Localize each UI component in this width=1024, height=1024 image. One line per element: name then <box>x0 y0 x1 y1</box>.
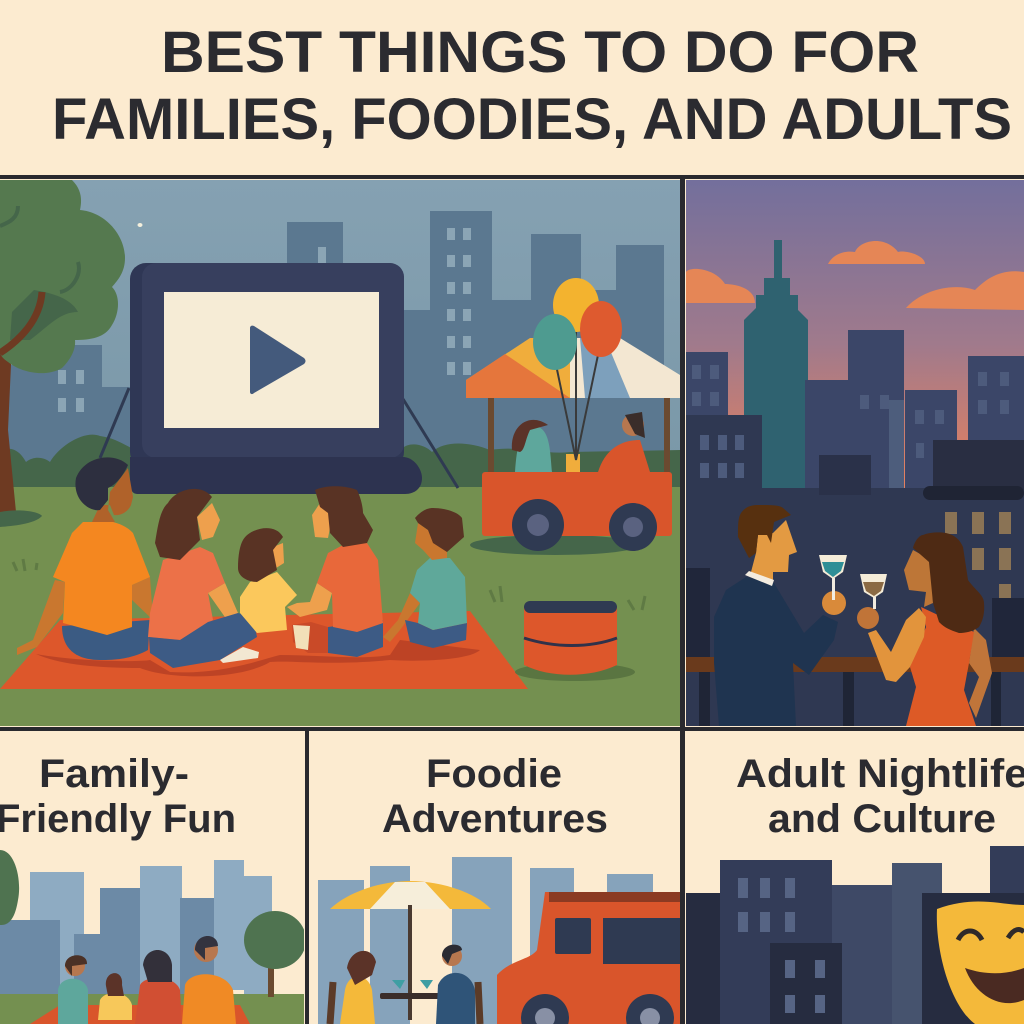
heading: and Culture <box>768 797 996 841</box>
panel: rooftop nightlife <box>686 180 1024 726</box>
person 1: orange shirt <box>17 457 153 660</box>
person 2: coral shirt <box>148 489 259 668</box>
food truck <box>497 892 680 1024</box>
skyscraper <box>744 240 808 488</box>
heading <box>737 758 1024 832</box>
heading <box>0 752 236 841</box>
panel: adult nightlife and culture <box>686 752 1024 1024</box>
icon: inflatable movie screen <box>100 263 458 494</box>
icon: comedy mask <box>937 902 1024 1024</box>
dark building <box>933 440 1024 490</box>
heading: Family- <box>39 752 189 796</box>
heading: Foodie <box>426 752 562 796</box>
title: BEST THINGS TO DO FOR <box>161 20 919 85</box>
panel: family-friendly fun <box>0 752 306 1024</box>
heading: Adult Nightlife <box>736 752 1024 796</box>
illustration: city and comedy mask <box>686 846 1024 1024</box>
grass tufts <box>13 559 645 610</box>
illustration: family in park <box>0 850 306 1024</box>
picnic blanket <box>0 611 528 689</box>
icon: wine glass (left) <box>819 555 847 600</box>
railing <box>686 657 1024 672</box>
panel: outdoor movie night <box>0 180 680 726</box>
person 3 blanket leg <box>292 622 328 653</box>
child: yellow shirt <box>238 528 297 633</box>
illustration: cafe and food truck <box>318 857 680 1024</box>
title: FAMILIES, FOODIES, AND ADULTS <box>52 87 1012 152</box>
grass <box>0 487 680 726</box>
icon: food cart and balloons <box>466 278 680 555</box>
woman <box>857 532 992 726</box>
man <box>714 505 846 726</box>
blanket shadows <box>36 640 480 676</box>
heading: Adventures <box>382 797 608 841</box>
panel: foodie adventures <box>318 752 680 1024</box>
family group <box>17 457 480 676</box>
icon: wine glass (right) <box>860 574 887 609</box>
heading: Friendly Fun <box>0 797 236 841</box>
icon: cooler <box>515 601 635 681</box>
skyline <box>8 211 664 462</box>
title <box>52 20 1012 152</box>
hedge <box>0 435 680 490</box>
person 3: red-orange shirt <box>287 486 383 657</box>
midground buildings <box>686 330 1024 488</box>
person 4: teal shirt <box>383 508 467 648</box>
heading <box>383 758 606 832</box>
foreground dark wall <box>686 488 1024 726</box>
icon: tree <box>0 180 125 527</box>
